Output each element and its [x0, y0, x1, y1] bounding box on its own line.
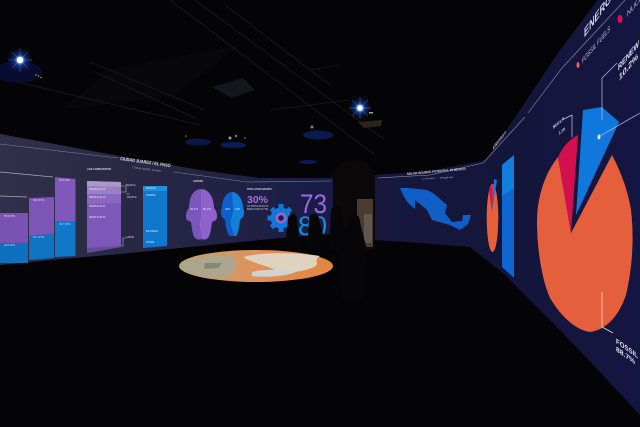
pie slice: nuclear: [558, 135, 578, 233]
spotlight left: [7, 47, 42, 78]
icon: purple head chart: [186, 180, 217, 240]
callout: renewable: [598, 38, 640, 140]
heading: solar source potential in Mexico: SOLAR SOURCE POTENTIAL IN MEXICO: [407, 167, 466, 176]
blue stacked column: OTHER: [146, 241, 155, 244]
people silhouettes: [285, 205, 367, 300]
floor map table: [179, 250, 333, 282]
icon: blue head chart: [221, 192, 244, 236]
small pie chart: [487, 179, 498, 252]
panel: left curved wall, Ciudad Juarez / El Paso: [0, 134, 333, 265]
stacked bar chart: 29.7 37%: [59, 222, 71, 226]
heading: Ciudad Juarez / El Paso: CIUDAD JUAREZ / EL PASO: [120, 156, 171, 168]
stacked bar chart: 32.7 37%: [33, 235, 45, 239]
stat: 30%: OF POPULATION IS: [247, 205, 269, 208]
callout: fossil: 88.7%: [616, 345, 635, 366]
blue stacked column: [143, 186, 167, 248]
stat: 30%: POPULATION GROWTH: [247, 188, 272, 191]
small heading: energy mix: ENERGY: [493, 129, 506, 151]
legend: Lower · Higher: [422, 176, 455, 180]
stacked bar chart: 24.0 37%: [4, 243, 16, 247]
doorway: [333, 160, 375, 250]
age composition stacked column: PEOPLE 20-29: [89, 196, 106, 199]
age composition stacked column: PEOPLE 15-19: [89, 188, 106, 191]
age composition stacked column: AGE COMPOSITION: [87, 167, 111, 171]
callout: nuclear: 1.1%: [559, 126, 565, 137]
age composition stacked column: PEOPLE 30-44: [89, 205, 106, 208]
legend: fossil fuels: [576, 25, 610, 68]
blue stacked column: PEOPLE: [146, 187, 156, 190]
legend: nuclear: [618, 0, 640, 23]
icon: blue head chart: 49%: [225, 207, 231, 211]
age composition stacked column: LABOR: [126, 236, 134, 239]
callout: nuclear: NUCLR: [553, 116, 564, 131]
age composition stacked column: PEOPLE: [127, 196, 137, 199]
blue stacked column: INFORMAL: [146, 230, 159, 233]
blue stacked column: FORMAL: [146, 194, 157, 197]
icon: gear: [268, 204, 294, 232]
stacked bar chart: 59.0 60%: [59, 178, 71, 182]
icon: purple head chart: 50.2%: [203, 207, 211, 211]
stat: 80: 80: [298, 211, 327, 241]
icon: purple head chart: GENDER: [193, 180, 204, 183]
age composition stacked column: PEOPLE 45-64: [89, 216, 106, 219]
pie slice: fossil: [537, 155, 633, 332]
age composition stacked column: [87, 167, 137, 253]
spotlight right: [348, 96, 373, 120]
pie chart: energy sources: [537, 38, 640, 366]
stat: 30%: 30%: [247, 195, 268, 206]
pie slice: renewable: [576, 107, 619, 215]
stacked bar chart: [0, 172, 76, 263]
map: Mexico: [400, 188, 471, 230]
stat: 30%: EMPLOYED IN THE: [247, 209, 268, 211]
callout: nuclear: [553, 115, 572, 137]
ceiling truss and projectors: [0, 0, 385, 164]
stat: 30%: [247, 188, 272, 211]
stacked bar chart: 59.6 37%: [33, 198, 45, 202]
column chart: blue bar: [502, 155, 514, 278]
icon: purple head chart: 49.7%: [190, 207, 198, 211]
panel: right wall, energy: [375, 0, 640, 415]
icon: blue head chart: 51%: [235, 207, 241, 211]
subheading: 2 CIUDAD JUAREZ · EL PASO: [132, 166, 161, 173]
age composition stacked column: PEOPLE: [126, 184, 136, 187]
stat: 73: 73: [300, 189, 327, 219]
projector box: [212, 78, 255, 98]
callout: fossil: [602, 292, 638, 366]
stacked bar chart: 55.5 37%: [4, 214, 16, 218]
